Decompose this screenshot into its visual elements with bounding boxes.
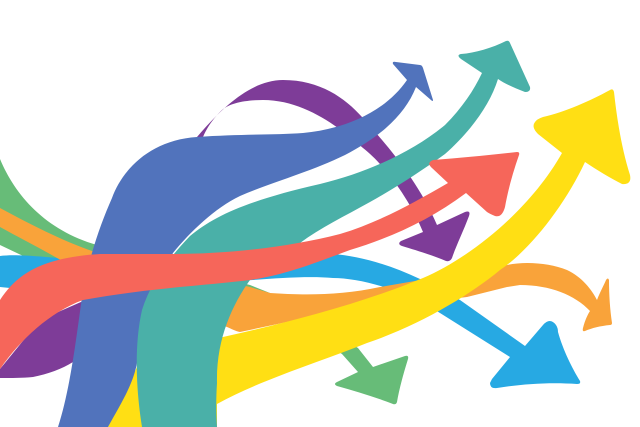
arrow: green <box>0 159 408 404</box>
arrow: purple <box>0 80 470 378</box>
arrow: dark blue <box>58 62 433 427</box>
arrow: coral <box>0 152 519 369</box>
arrow: orange <box>0 208 612 332</box>
arrow: light blue <box>0 254 580 388</box>
arrow: yellow <box>108 89 630 427</box>
arrow: teal <box>137 41 530 427</box>
